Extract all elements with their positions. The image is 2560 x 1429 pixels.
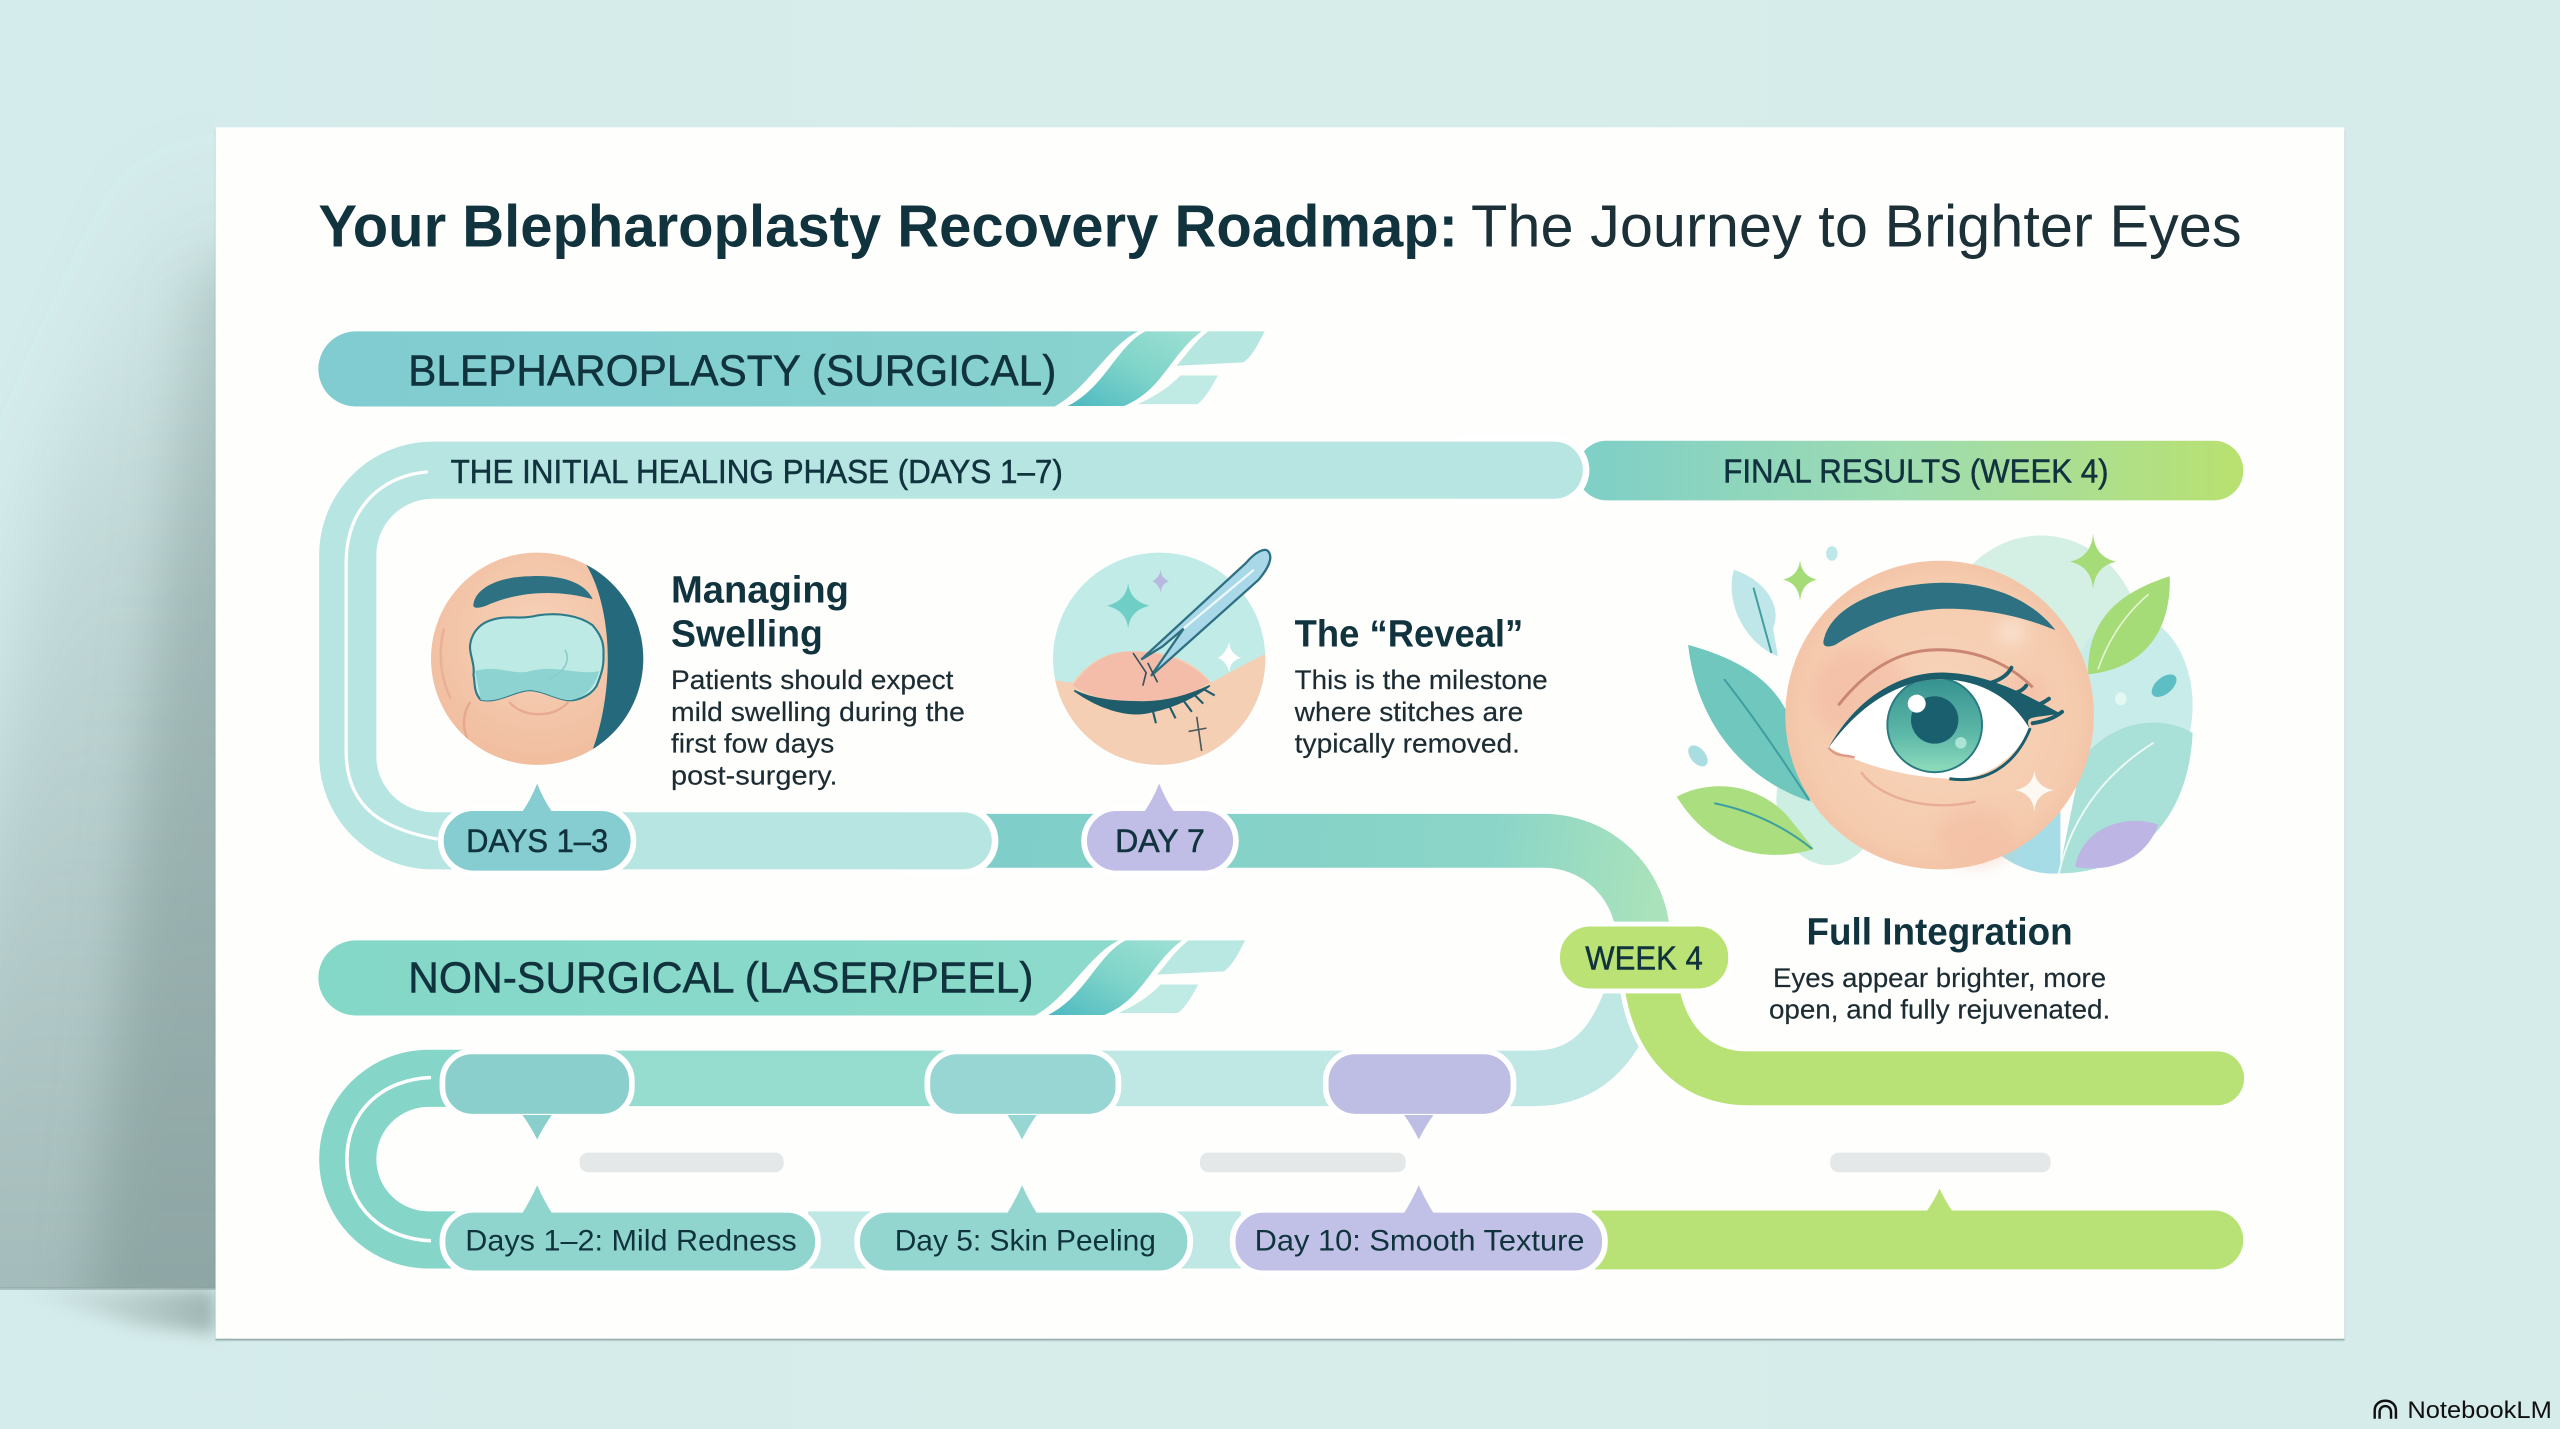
track: lower connectors (808, 1222, 1241, 1257)
pill: day 5 (857, 1185, 1190, 1273)
badge: week 4 (1558, 924, 1731, 991)
eyelid crease (1838, 650, 2033, 705)
text: the reveal: The “Reveal” (1295, 613, 1523, 656)
upper lid and lashes (1829, 673, 2060, 748)
text: the reveal: typically removed. (1295, 728, 1520, 759)
leaf: lower right pale (2059, 723, 2193, 873)
text: managing swelling: Swelling (671, 613, 823, 656)
badge: week 4: WEEK 4 (1585, 941, 1703, 978)
title: Your Blepharoplasty Recovery Roadmap: (318, 193, 1458, 260)
notebooklm logo: NotebookLM (2407, 1397, 2552, 1424)
text: managing swelling (671, 568, 965, 790)
leaf: purple (2075, 821, 2158, 868)
heading band: non-surgical: NON-SURGICAL (LASER/PEEL) (408, 955, 1033, 1003)
face circle (1785, 561, 2094, 869)
empty callout 2 (927, 1051, 1118, 1140)
pill: day 5: Day 5: Skin Peeling (895, 1225, 1156, 1258)
eyebrow (1823, 583, 2056, 647)
pill: day 10: Day 10: Smooth Texture (1255, 1225, 1584, 1258)
icon: cold compress on eye (431, 547, 653, 767)
text: the reveal (1294, 613, 1548, 759)
card shadow on wall (0, 228, 216, 1340)
lower lid (1949, 728, 2030, 780)
leaf: big teal (1688, 645, 1811, 802)
leaf: right green (2088, 576, 2170, 674)
text: the reveal: This is the milestone (1295, 664, 1548, 695)
empty callout 3 (1326, 1051, 1513, 1140)
text: managing swelling: mild swelling during the (671, 696, 965, 727)
title (318, 193, 2242, 260)
track: non-surgical upper (473, 989, 1634, 1078)
green final track: lower (1592, 1189, 2243, 1269)
text: managing swelling: Patients should expect (671, 664, 954, 695)
placeholder bar 2 (1200, 1153, 1406, 1172)
text: managing swelling: post-surgery. (671, 759, 838, 790)
white card (216, 127, 2344, 1339)
badge: day 7: DAY 7 (1115, 823, 1205, 859)
text: managing swelling: first fow days (671, 728, 834, 759)
final results bar: FINAL RESULTS (WEEK 4) (1723, 453, 2109, 490)
green final track: upper (1651, 980, 2217, 1078)
track: initial healing phase: THE INITIAL HEALING PHASE (DAYS 1–7) (451, 454, 1063, 491)
heading band: non-surgical (318, 940, 1245, 1015)
placeholder bar 1 (580, 1153, 784, 1172)
sparkle: green large (2070, 534, 2116, 589)
leaf: bottom green (1677, 786, 1814, 855)
empty callout 1 (442, 1051, 632, 1140)
badge: days 1-3: DAYS 1–3 (466, 823, 608, 859)
leaf: pale (1732, 570, 1778, 656)
text: full integration (1769, 910, 2110, 1024)
title: The Journey to Brighter Eyes (1471, 193, 2242, 260)
droplets (1684, 546, 2181, 770)
text: the reveal: where stitches are (1294, 696, 1523, 727)
sparkle: white (2015, 771, 2054, 811)
pill: days 1-2 (442, 1185, 818, 1273)
text: managing swelling: Managing (671, 568, 849, 611)
under-eye line (1861, 772, 1976, 805)
track: non-surgical loop (347, 1078, 473, 1241)
badge: days 1-3 (441, 784, 633, 873)
track: initial healing phase (346, 454, 1554, 841)
sparkle: green small (1783, 560, 1817, 601)
pill: day 10 (1233, 1185, 1605, 1273)
track: surgical second segment to week 4 (980, 841, 1643, 940)
final results bar (1577, 441, 2243, 500)
heading band: surgical (318, 331, 1265, 407)
text: full integration: open, and fully rejuvenated. (1769, 993, 2110, 1024)
heading band: surgical: BLEPHAROPLASTY (SURGICAL) (408, 347, 1056, 395)
text: full integration: Eyes appear brighter, more (1773, 962, 2106, 993)
placeholder bar 3 (1830, 1153, 2051, 1172)
icon: stitch removal with tweezers (1045, 550, 1273, 775)
eye (1829, 679, 2029, 779)
text: full integration: Full Integration (1807, 910, 2073, 953)
badge: day 7 (1084, 784, 1236, 873)
illustration: rejuvenated eye with leaves (1677, 534, 2193, 874)
pill: days 1-2: Days 1–2: Mild Redness (465, 1225, 797, 1258)
